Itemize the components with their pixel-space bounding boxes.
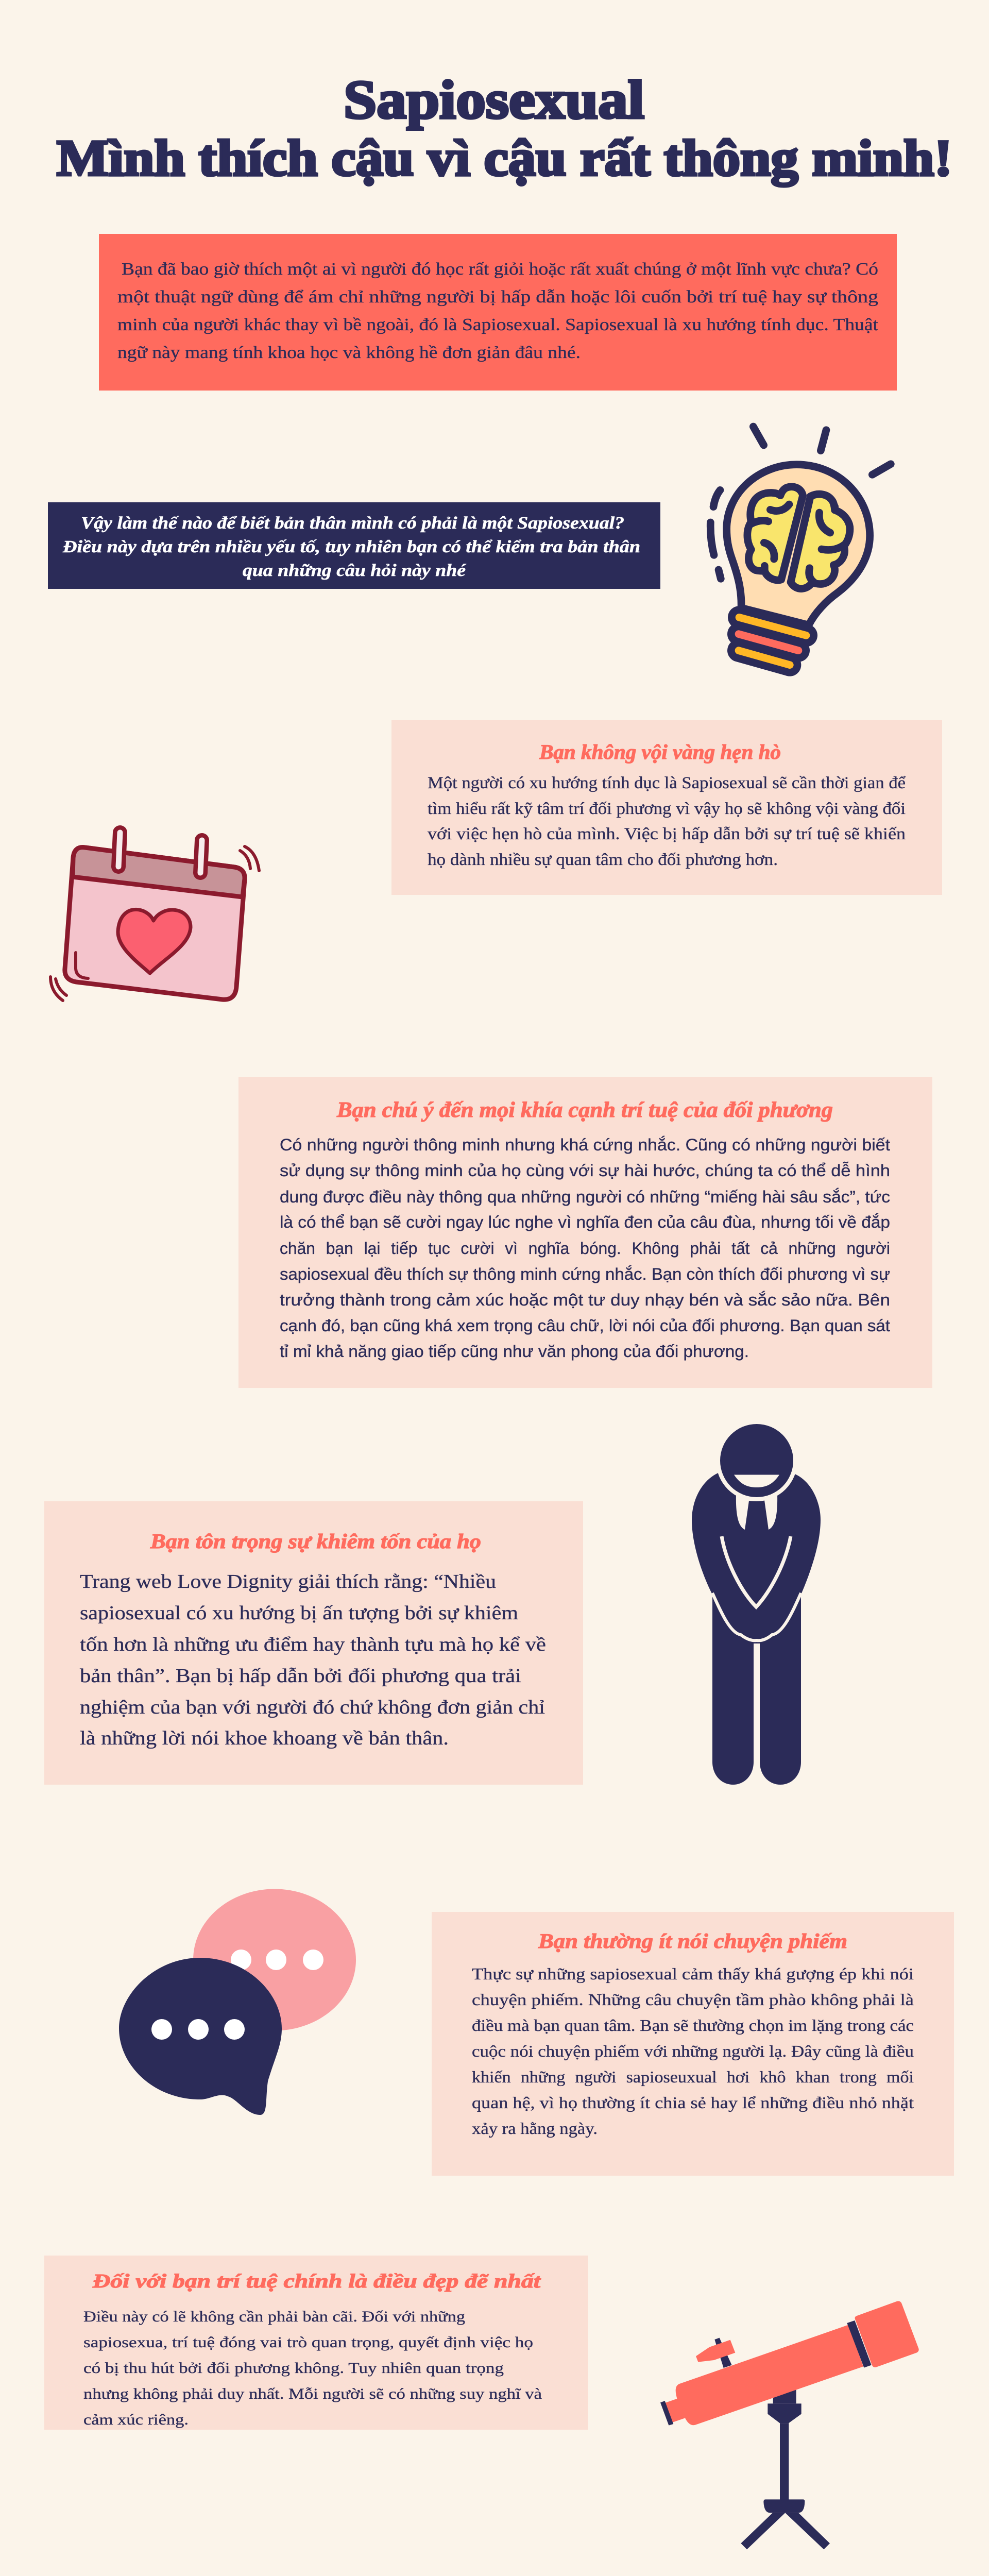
icon: speech bubbles: [119, 1889, 356, 2115]
heading: Đối với bạn trí tuệ chính là điều đẹp đẽ nhất: [92, 2270, 541, 2292]
icon: calendar with heart: [50, 833, 259, 1001]
body text: [83, 2308, 542, 2428]
body text: cạnh đó, bạn cũng khá xem trọng câu chữ, lời nói của đối phương. Bạn quan sát: [280, 1316, 890, 1335]
panel: question banner: Điều này dựa trên nhiều yếu tố, tuy nhiên bạn có thể kiểm tra bản thân: [62, 537, 640, 556]
body text: cảm xúc riêng.: [83, 2411, 189, 2428]
panel: introduction: ngữ này mang tính khoa học và không hề đơn giản đâu nhé.: [117, 343, 581, 362]
body text: họ dành nhiều sự quan tâm cho đối phương hơn.: [428, 851, 778, 869]
panel: introduction: minh của người khác thay vì bề ngoài, đó là Sapiosexual. Sapiosexual là xu hướng tính dục. Thuật: [117, 315, 879, 334]
body text: sapiosexual đều thích sự thông minh cứng nhắc. Bạn còn thích đối phương vì sự: [280, 1265, 890, 1283]
body text: điều mà bạn quan tâm. Bạn sẽ thường chọn im lặng trong các: [472, 2016, 914, 2035]
body text: có bị thu hút bởi đối phương không. Tuy nhiên quan trọng: [83, 2360, 504, 2377]
body text: là những lời nói khoe khoang về bản thân.: [80, 1727, 449, 1749]
body text: sapiosexual có xu hướng bị ấn tượng bởi sự khiêm: [80, 1602, 518, 1624]
body text: nhưng không phải duy nhất. Mỗi người sẽ có những suy nghĩ và: [83, 2385, 542, 2402]
body text: dung được điều này thông qua những người có những “miếng hài sâu sắc”, tức: [280, 1188, 890, 1206]
heading: Bạn không vội vàng hẹn hò: [539, 740, 781, 764]
body text: khiến những người sapioseuxual hơi khô khan trong mối: [472, 2067, 914, 2086]
panel: question banner: Vậy làm thế nào để biết bản thân mình có phải là một Sapiosexual?: [81, 514, 624, 533]
body text: trưởng thành trong cảm xúc hoặc một tư duy nhạy bén và sắc sảo nữa. Bên: [280, 1291, 890, 1309]
panel: rarely small talk: [432, 1912, 954, 2176]
body text: với việc hẹn hò của mình. Việc bị hấp dẫn bởi sự trí tuệ sẽ khiến: [428, 825, 906, 843]
body text: quan hệ, vì họ thường ít chia sẻ hay lể những điều nhỏ nhặt: [472, 2093, 914, 2112]
body text: sử dụng sự thông minh của họ cùng với sự hài hước, chúng ta có thể dễ hình: [280, 1161, 890, 1180]
body text: [472, 1964, 914, 2138]
body text: [280, 1136, 890, 1361]
body text: Một người có xu hướng tính dục là Sapiosexual sẽ cần thời gian để: [428, 774, 906, 792]
panel: question banner: [48, 502, 660, 589]
heading: Bạn chú ý đến mọi khía cạnh trí tuệ của đối phương: [336, 1098, 833, 1122]
body text: chuyện phiếm. Những câu chuyện tầm phào không phải là: [472, 1990, 914, 2009]
title: Sapiosexual: [344, 70, 644, 130]
body text: Thực sự những sapiosexual cảm thấy khá gượng ép khi nói: [472, 1964, 914, 1983]
heading: Bạn tôn trọng sự khiêm tốn của họ: [150, 1530, 481, 1553]
body text: xảy ra hằng ngày.: [472, 2119, 598, 2138]
panel: respecting humility: [44, 1501, 583, 1785]
body text: Có những người thông minh nhưng khá cứng nhắc. Cũng có những người biết: [280, 1136, 890, 1154]
panel: question banner: qua những câu hỏi này nhé: [243, 561, 467, 580]
panel: not rushing into dating: [391, 720, 942, 895]
icon: bowing man in suit: [692, 1420, 821, 1785]
icon: telescope: [660, 2301, 919, 2549]
title: Mình thích cậu vì cậu rất thông minh!: [57, 129, 952, 187]
body text: nghiệm của bạn với người đó chứ không đơn giản chỉ: [80, 1697, 545, 1718]
body text: tìm hiểu rất kỹ tâm trí đối phương vì vậy họ sẽ không vội vàng đối: [428, 800, 906, 818]
body text: tốn hơn là những ưu điểm hay thành tựu mà họ kể về: [80, 1634, 546, 1655]
panel: introduction: Bạn đã bao giờ thích một ai vì người đó học rất giỏi hoặc rất xuất chúng ở một lĩnh vực chưa? Có: [122, 260, 878, 279]
panel: every aspect of intelligence: [238, 1077, 932, 1388]
body text: cuộc nói chuyện phiếm với những người lạ. Đây cũng là điều: [472, 2042, 914, 2060]
body text: là có thể bạn sẽ cười ngay lúc nghe vì nghĩa đen của câu đùa, nhưng tối về đắp: [280, 1213, 890, 1231]
body text: Trang web Love Dignity giải thích rằng: “Nhiều: [80, 1571, 496, 1592]
body text: Điều này có lẽ không cần phải bàn cãi. Đối với những: [83, 2308, 465, 2325]
heading: Bạn thường ít nói chuyện phiếm: [538, 1929, 847, 1953]
panel: introduction: [99, 234, 897, 391]
body text: sapiosexua, trí tuệ đóng vai trò quan trọng, quyết định việc họ: [83, 2334, 533, 2351]
body text: chăn bạn lại tiếp tục cười vì nghĩa bóng. Không phải tất cả những người: [280, 1239, 890, 1258]
body text: tỉ mỉ khả năng giao tiếp cũng như văn phong của đối phương.: [280, 1342, 749, 1361]
body text: bản thân”. Bạn bị hấp dẫn bởi đối phương qua trải: [80, 1665, 521, 1687]
body text: [80, 1571, 546, 1749]
panel: introduction: một thuật ngữ dùng để ám chỉ những người bị hấp dẫn hoặc lôi cuốn bởi trí tuệ hay sự thông: [117, 287, 878, 307]
panel: intelligence is most attractive: [44, 2256, 588, 2430]
body text: [428, 774, 906, 869]
title: [57, 70, 952, 187]
icon: light bulb with brain: [710, 427, 891, 665]
